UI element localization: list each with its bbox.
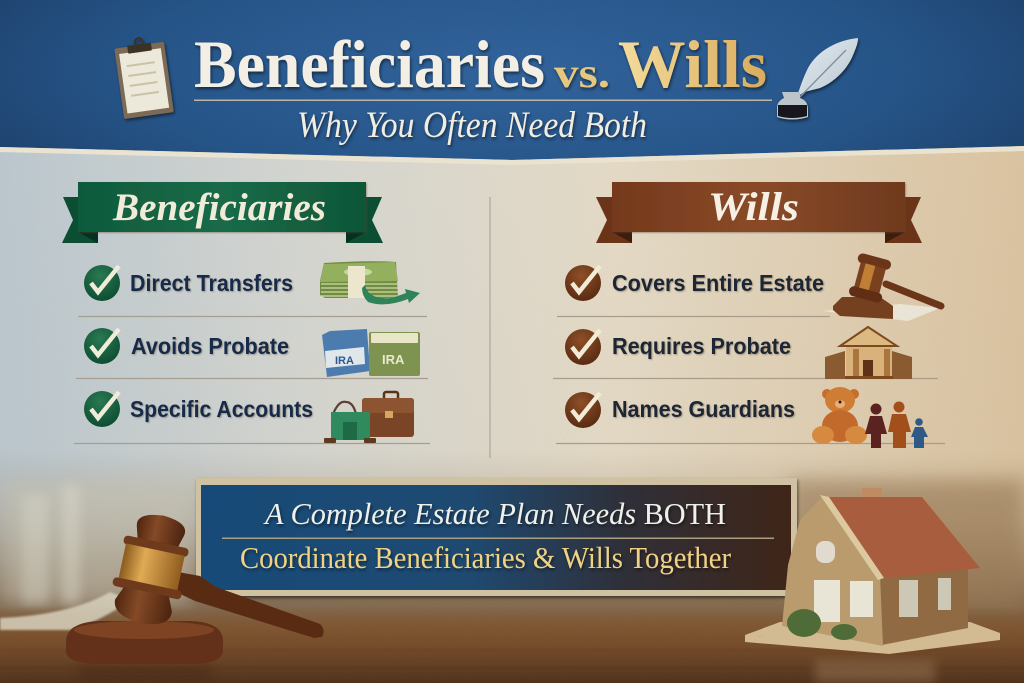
callout rule bbox=[222, 538, 774, 539]
header banner bbox=[0, 0, 1024, 165]
title: vs. bbox=[554, 51, 610, 97]
ribbon: wills: Wills bbox=[708, 184, 799, 229]
row: requires probate bbox=[565, 329, 791, 365]
callout box bbox=[196, 478, 797, 596]
icon: IRA folders: IRA bbox=[335, 355, 354, 367]
row: covers entire estate: Covers Entire Estate bbox=[612, 270, 824, 296]
bushes bbox=[787, 609, 857, 640]
row: covers entire estate bbox=[565, 265, 824, 301]
row: names guardians bbox=[565, 392, 795, 428]
side windows bbox=[899, 578, 951, 617]
house base bbox=[745, 622, 1000, 654]
icon: gavel on document bbox=[822, 252, 941, 321]
house front wall bbox=[782, 497, 883, 646]
ribbon: beneficiaries bbox=[62, 182, 383, 243]
icon: quill and inkwell bbox=[777, 38, 858, 120]
row: names guardians: Names Guardians bbox=[612, 396, 795, 422]
row: specific accounts bbox=[84, 391, 313, 427]
ribbon: beneficiaries: Beneficiaries bbox=[112, 186, 326, 229]
row: direct transfers: Direct Transfers bbox=[130, 270, 293, 296]
ribbon: wills bbox=[596, 182, 922, 243]
row: direct transfers bbox=[84, 265, 293, 301]
row: avoids probate bbox=[84, 328, 289, 364]
row: requires probate: Requires Probate bbox=[612, 333, 791, 359]
icon: money with arrow bbox=[320, 261, 420, 304]
title bbox=[194, 26, 767, 102]
divider: centre bbox=[490, 197, 491, 458]
panel: wills bbox=[553, 182, 945, 448]
blurred paper behind gavel bbox=[0, 592, 130, 630]
title: Beneficiaries bbox=[194, 26, 545, 102]
house side wall bbox=[880, 565, 968, 645]
row: avoids probate: Avoids Probate bbox=[131, 333, 289, 359]
title: Wills bbox=[618, 26, 767, 102]
subtitle: Why You Often Need Both bbox=[297, 105, 647, 146]
chimney bbox=[862, 488, 882, 518]
gavel head bbox=[106, 508, 197, 630]
roof bbox=[828, 497, 980, 578]
wooden table bbox=[0, 606, 1024, 683]
icon: clipboard bbox=[113, 35, 174, 119]
icon: bags bbox=[324, 392, 414, 443]
illustration: model house bbox=[745, 488, 1000, 654]
gavel base bbox=[66, 621, 223, 664]
row: specific accounts: Specific Accounts bbox=[130, 396, 313, 422]
panel: beneficiaries bbox=[62, 182, 430, 444]
illustration: large gavel bbox=[66, 508, 324, 664]
attic window bbox=[816, 541, 835, 563]
row dividers bbox=[553, 316, 945, 444]
icon: family bbox=[865, 402, 928, 448]
icon: courthouse bbox=[825, 327, 912, 379]
icon: teddy bear bbox=[812, 387, 867, 444]
callout line 1: A Complete Estate Plan Needs BOTH bbox=[263, 496, 726, 531]
front windows bbox=[814, 580, 873, 622]
gavel handle bbox=[176, 572, 324, 638]
icon: IRA folders bbox=[322, 329, 420, 377]
title rule bbox=[194, 100, 772, 101]
row dividers bbox=[74, 316, 430, 444]
callout line 2: Coordinate Beneficiaries & Wills Together bbox=[240, 540, 732, 575]
icon: IRA folders: IRA bbox=[382, 352, 405, 367]
